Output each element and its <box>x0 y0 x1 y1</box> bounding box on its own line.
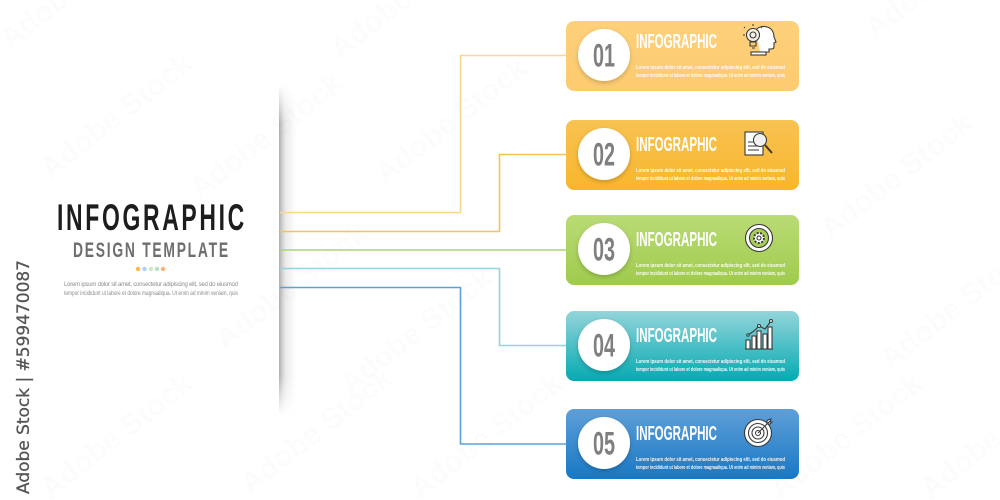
colour dots <box>136 267 165 271</box>
body text: Lorem ipsum dolor sit amet, consectetur adipiscing elit, sed do eiusmod <box>636 359 785 365</box>
icon: target with arrow <box>744 419 772 446</box>
number badge <box>578 417 630 469</box>
number badge <box>578 223 630 275</box>
card 01 <box>566 21 799 91</box>
heading: INFOGRAPHIC <box>636 31 717 53</box>
description <box>64 282 238 297</box>
connector line 1 <box>280 56 566 212</box>
body text <box>636 457 785 471</box>
icon: gear target <box>746 224 772 252</box>
heading: INFOGRAPHIC <box>636 325 717 347</box>
body text <box>636 168 785 182</box>
icon: bar chart <box>745 320 773 349</box>
connector line 5 <box>280 288 566 444</box>
heading: INFOGRAPHIC <box>636 423 717 445</box>
subtitle: DESIGN TEMPLATE <box>73 238 228 262</box>
description: Lorem ipsum dolor sit amet, consectetur adipiscing elit, sed do eiusmod <box>64 282 238 288</box>
title: INFOGRAPHIC <box>57 196 244 238</box>
number badge <box>578 128 630 180</box>
watermark: Adobe Stock <box>184 66 349 206</box>
number badge <box>578 29 630 81</box>
body text: Lorem ipsum dolor sit amet, consectetur adipiscing elit, sed do eiusmod <box>636 65 785 71</box>
watermark: Adobe Stock <box>34 46 199 186</box>
body text: Lorem ipsum dolor sit amet, consectetur adipiscing elit, sed do eiusmod <box>636 457 785 463</box>
watermark: Adobe Stock <box>209 216 374 356</box>
body text: tempor incididunt ut labore et dolore magnaaliqua. Ut enim ad minim veniam, quis <box>636 465 785 471</box>
body text: tempor incididunt ut labore et dolore magnaaliqua. Ut enim ad minim veniam, quis <box>636 73 785 79</box>
connector line 2 <box>280 154 566 232</box>
number badge: 04 <box>593 328 615 364</box>
card 03 <box>566 215 799 285</box>
body text <box>636 263 785 277</box>
body text: tempor incididunt ut labore et dolore magnaaliqua. Ut enim ad minim veniam, quis <box>636 271 785 277</box>
watermark: Adobe Stock <box>234 361 399 500</box>
watermark: Adobe Stock <box>369 51 534 191</box>
number badge: 03 <box>593 232 615 268</box>
number badge <box>578 319 630 371</box>
stock id side label: Adobe Stock | #599470087 <box>14 260 33 494</box>
left panel text <box>57 196 244 297</box>
left panel shadow <box>279 89 292 410</box>
number badge: 01 <box>593 38 615 74</box>
description: tempor incididunt ut labore et dolore magnaaliqua. Ut enim ad minim veniam, quis <box>64 291 238 297</box>
number badge: 02 <box>593 136 615 172</box>
body text <box>636 359 785 373</box>
body text <box>636 65 785 79</box>
body text: Lorem ipsum dolor sit amet, consectetur adipiscing elit, sed do eiusmod <box>636 263 785 269</box>
number badge: 05 <box>593 426 615 462</box>
watermark: Adobe Stock <box>334 261 499 401</box>
connector line 3 <box>280 249 566 251</box>
card 05 <box>566 409 799 479</box>
body text: tempor incididunt ut labore et dolore magnaaliqua. Ut enim ad minim veniam, quis <box>636 176 785 182</box>
connector line 4 <box>280 268 566 346</box>
icon: head with gear bulb <box>743 24 776 55</box>
heading: INFOGRAPHIC <box>636 134 717 156</box>
body text: tempor incididunt ut labore et dolore magnaaliqua. Ut enim ad minim veniam, quis <box>636 367 785 373</box>
infographic canvas <box>16 21 799 494</box>
icon: document with magnifier <box>745 132 772 155</box>
watermark: Adobe Stock <box>814 106 979 246</box>
body text: Lorem ipsum dolor sit amet, consectetur adipiscing elit, sed do eiusmod <box>636 168 785 174</box>
heading: INFOGRAPHIC <box>636 229 717 251</box>
card 02 <box>566 120 799 190</box>
card 04 <box>566 311 799 381</box>
